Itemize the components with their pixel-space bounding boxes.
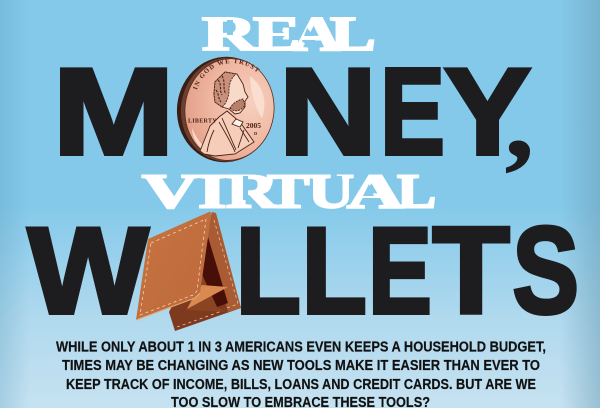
heading: MONEY,: Y [444,42,531,180]
intro text: KEEP TRACK OF INCOME, BILLS, LOANS AND CREDIT CARDS. BUT ARE WE [66,377,536,393]
coin lettering: LIBERTY [188,118,217,124]
heading: MONEY,: , [505,63,534,179]
heading: REAL: R [202,6,258,61]
heading: VIRTUAL: U [308,164,354,219]
coin lettering: D [254,131,258,136]
heading: REAL: L [330,6,376,61]
heading: REAL [202,6,376,61]
heading: VIRTUAL: L [397,164,436,218]
lincoln bust [200,72,254,156]
heading: MONEY,: M [53,43,175,180]
heading: WALLETS: L [302,203,367,340]
heading: VIRTUAL: R [226,165,278,219]
heading: VIRTUAL [142,164,436,219]
coin lettering [188,58,261,136]
heading: MONEY,: E [380,44,445,181]
heading: REAL: E [253,7,300,61]
heading: MONEY,: N [279,44,377,181]
coin lettering: IN GOD WE TRUST [193,58,260,90]
heading: VIRTUAL: V [142,165,199,219]
heading: REAL: A [293,6,341,61]
icon: wallet [136,212,241,331]
heading: MONEY, [53,42,534,181]
heading: WALLETS: W [28,201,149,339]
intro text [56,340,546,408]
heading: WALLETS: E [368,202,432,340]
heading: WALLETS [28,201,579,340]
icon: penny [176,56,274,162]
heading: WALLETS: S [512,202,579,339]
intro text: TIMES MAY BE CHANGING AS NEW TOOLS MAKE IT EASIER THAN EVER TO [62,358,540,374]
coin lettering: 2005 [246,121,261,130]
heading: VIRTUAL: I [198,164,227,218]
heading: WALLETS: L [236,203,301,340]
intro text: WHILE ONLY ABOUT 1 IN 3 AMERICANS EVEN KEEPS A HOUSEHOLD BUDGET, [56,340,546,356]
heading: WALLETS: T [432,203,510,340]
heading: VIRTUAL: A [347,165,404,219]
heading: VIRTUAL: T [267,164,310,219]
